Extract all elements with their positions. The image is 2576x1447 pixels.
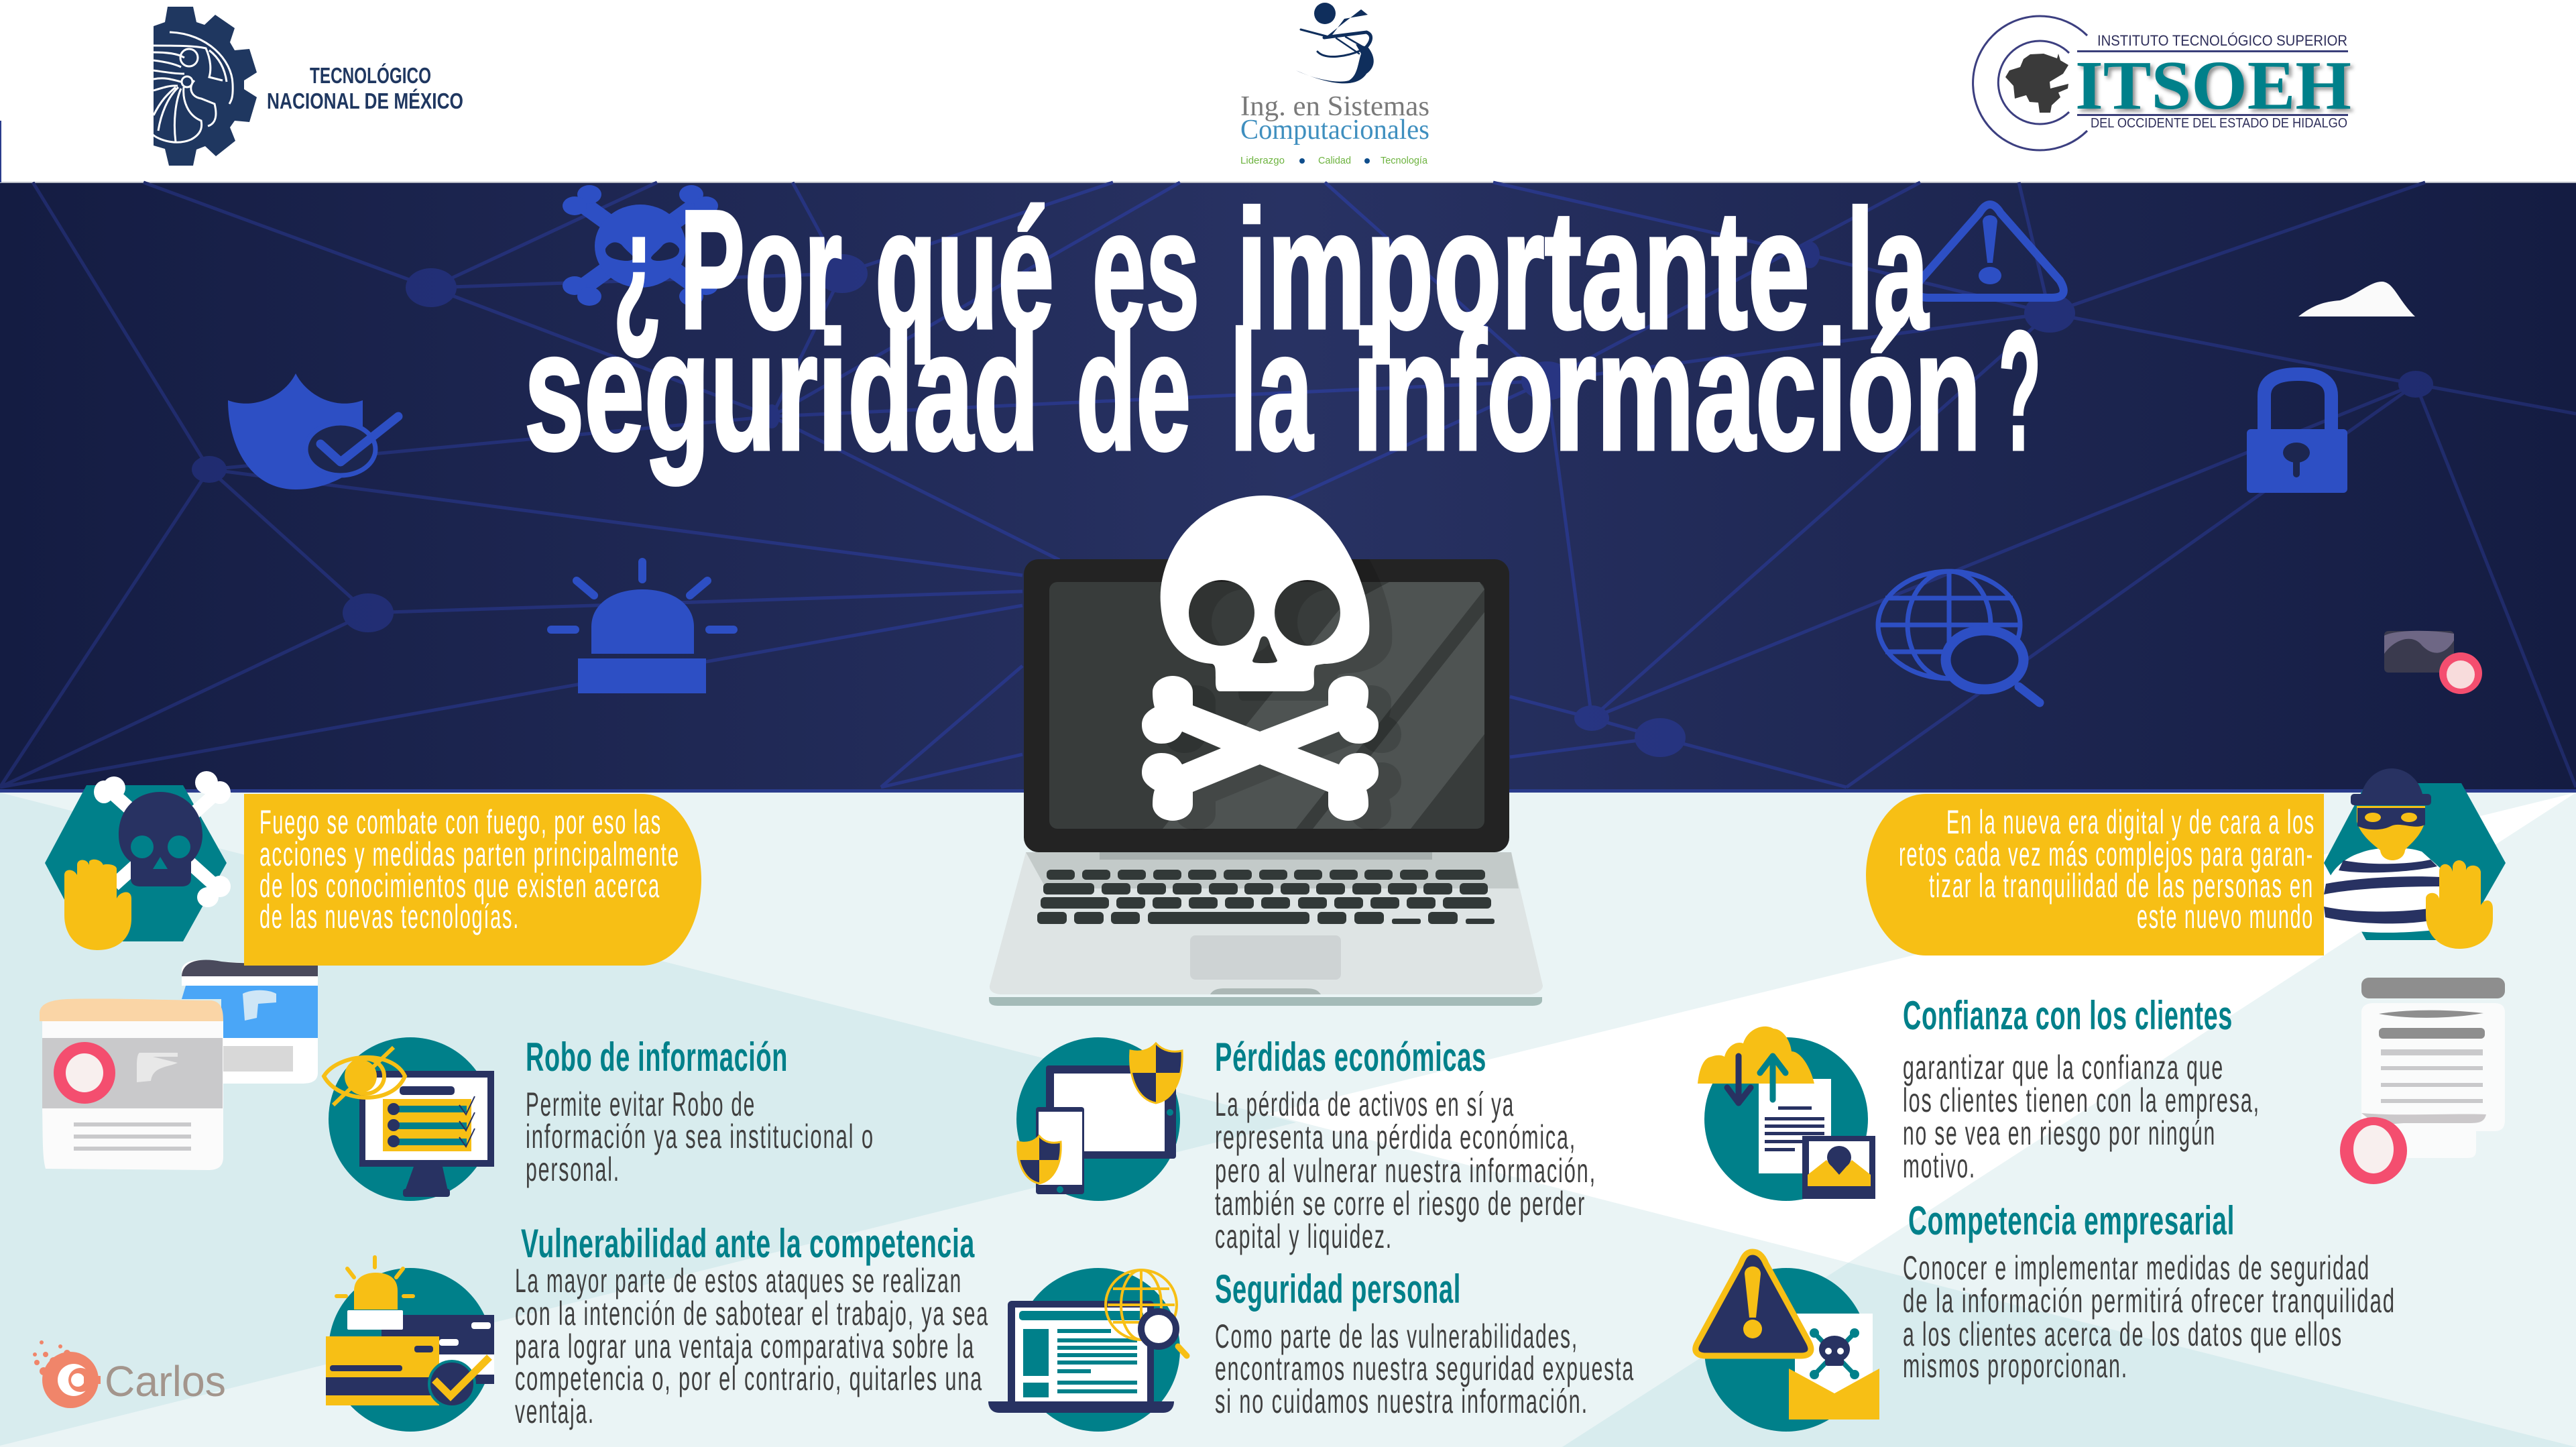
icon: globe with magnifier (1878, 571, 2040, 703)
icon: gear with eagle knight (152, 7, 257, 166)
icon: blue skull and crossbones (563, 185, 718, 306)
heading and text: Robo de información: Robo de información (526, 1035, 788, 1080)
title: ¿ (613, 176, 661, 364)
icon: shield with check (228, 373, 398, 489)
heading and text: Confianza con los clientes: los clientes tienen con la empresa, (1903, 1082, 2260, 1119)
icon: padlock (2247, 374, 2347, 493)
callout: right yellow (1866, 794, 2324, 956)
icon: cloud with document and photo (1698, 1027, 1875, 1201)
panel: right certificate document (2340, 978, 2505, 1184)
logo text: INSTITUTO TECNOLÓGICO SUPERIOR (2097, 32, 2347, 49)
title: importante (1236, 176, 1810, 364)
logo text: ITSOEH (2078, 50, 2354, 127)
logo: ITSOEH (1973, 16, 2354, 150)
heading and text: Pérdidas económicas: representa una pérdida económica, (1215, 1118, 1576, 1156)
icon: monitor checklist with eye (324, 1037, 494, 1201)
heading and text: Confianza con los clientes: garantizar que la confianza que (1903, 1049, 2224, 1086)
dark network banner (0, 121, 2576, 793)
laptop base (989, 852, 1543, 1006)
logo: Ing. en Sistemas Computacionales: Calidad (1318, 155, 1351, 166)
icon: laptop webpage with globe and magnifier (988, 1268, 1187, 1432)
icon: stylised figure swoosh (1296, 3, 1374, 83)
heading and text: Vulnerabilidad ante la competencia: Vulnerabilidad ante la competencia (521, 1221, 975, 1266)
heading and text: Pérdidas económicas (1215, 1035, 1596, 1255)
panel: left stacked documents (40, 960, 318, 1170)
heading and text: Confianza con los clientes: no se vea en riesgo por ningún (1903, 1114, 2216, 1152)
callout: right yellow: En la nueva era digital y de cara a los (1946, 803, 2315, 841)
callout: left yellow: de los conocimientos que existen acerca (259, 867, 660, 905)
icon: warning triangle and envelope (1696, 1252, 1879, 1432)
heading and text: Confianza con los clientes (1903, 993, 2260, 1185)
logo text: DEL OCCIDENTE DEL ESTADO DE HIDALGO (2091, 116, 2347, 131)
heading and text: Pérdidas económicas: capital y liquidez. (1215, 1218, 1393, 1255)
icon: alarm and credit cards (326, 1257, 494, 1432)
callout: right yellow: este nuevo mundo (2137, 898, 2314, 935)
title: de (1076, 297, 1191, 485)
heading and text: Vulnerabilidad ante la competencia: para lograr una ventaja comparativa sobre la (515, 1328, 975, 1365)
heading and text: Competencia empresarial (1903, 1198, 2396, 1385)
callout: left yellow (244, 794, 701, 966)
heading and text: Confianza con los clientes: Confianza con los clientes (1903, 993, 2233, 1038)
title: información (1352, 297, 1981, 485)
heading and text: Seguridad personal (1215, 1267, 1635, 1420)
heading and text: Robo de información (526, 1035, 874, 1188)
logo text: ITSOEH (2075, 47, 2351, 124)
logo: Tecnológico Nacional de México (152, 7, 463, 166)
text: ? (1999, 297, 2041, 485)
icon: left hexagon with skull and stop hand (45, 771, 231, 950)
heading and text: Pérdidas económicas: La pérdida de activos en sí ya (1215, 1086, 1515, 1123)
skull shadow (1167, 582, 1401, 829)
heading and text: Vulnerabilidad ante la competencia: ventaja. (515, 1393, 595, 1430)
keyboard (1037, 870, 1495, 924)
title: qué (875, 176, 1054, 364)
laptop screen (1024, 559, 1509, 852)
title: seguridad (524, 297, 1039, 485)
title: es (1092, 176, 1199, 364)
logo: Ing. en Sistemas Computacionales: Computacionales (1240, 115, 1429, 146)
heading and text: Seguridad personal: Seguridad personal (1215, 1267, 1461, 1312)
logo text: NACIONAL DE MÉXICO (267, 89, 463, 113)
heading and text: Seguridad personal: encontramos nuestra seguridad expuesta (1215, 1350, 1635, 1387)
callout: right yellow: tizar la tranquilidad de las personas en (1929, 867, 2314, 905)
heading and text: Robo de información: Permite evitar Robo de (526, 1086, 756, 1123)
logo: Ing. en Sistemas Computacionales: Tecnología (1381, 155, 1428, 166)
icon: right hexagon with thief and stop hand (2324, 768, 2506, 949)
logo: Carlos: Carlos (105, 1357, 226, 1405)
heading and text: Pérdidas económicas: pero al vulnerar nuestra información, (1215, 1152, 1596, 1190)
callout: left yellow: Fuego se combate con fuego, por eso las (259, 803, 662, 841)
logo text: Ing. en Sistemas (1240, 91, 1429, 122)
rings and state map (1973, 16, 2087, 150)
laptop illustration (989, 496, 1543, 1006)
logo: Ing. en Sistemas Computacionales (1240, 3, 1429, 166)
logo: Carlos (33, 1340, 226, 1408)
heading and text: Competencia empresarial: mismos proporcionan. (1903, 1347, 2128, 1385)
icon: warning triangle (1916, 205, 2064, 298)
heading and text: Vulnerabilidad ante la competencia: La mayor parte de estos ataques se realizan (515, 1262, 962, 1299)
heading and text: Pérdidas económicas: también se corre el riesgo de perder (1215, 1185, 1586, 1222)
title: Por (680, 176, 842, 364)
decorative white mountain (2298, 282, 2415, 316)
callout: left yellow: de las nuevas tecnologías. (259, 898, 520, 935)
icon: envelope and red ring (2384, 631, 2482, 694)
title: la (1230, 297, 1313, 485)
heading and text: Seguridad personal: si no cuidamos nuestra información. (1215, 1383, 1588, 1420)
logo text (267, 63, 463, 113)
logo: Ing. en Sistemas Computacionales: Liderazgo (1240, 155, 1285, 166)
lower background panel with geometric shapes (0, 792, 2576, 1447)
heading and text: Robo de información: personal. (526, 1151, 620, 1188)
icon: tablet and phone with shields (1016, 1037, 1182, 1201)
heading and text: Seguridad personal: Como parte de las vulnerabilidades, (1215, 1318, 1578, 1355)
heading and text: Vulnerabilidad ante la competencia: con la intención de sabotear el trabajo, ya sea (515, 1295, 989, 1332)
heading and text: Pérdidas económicas: Pérdidas económicas (1215, 1035, 1486, 1080)
title (524, 176, 2041, 485)
callout: left yellow: acciones y medidas parten principalmente (259, 835, 680, 873)
logo text: TECNOLÓGICO (310, 63, 431, 88)
title: la (1847, 176, 1929, 364)
heading and text: Vulnerabilidad ante la competencia: competencia o, por el contrario, quitarles una (515, 1360, 983, 1397)
heading and text: Confianza con los clientes: motivo. (1903, 1147, 1976, 1185)
icon: alarm siren (551, 562, 734, 693)
heading and text: Robo de información: información ya sea institucional o (526, 1118, 874, 1155)
skull and crossbones (1142, 496, 1379, 821)
heading and text: Vulnerabilidad ante la competencia (515, 1221, 989, 1430)
heading and text: Competencia empresarial: Competencia empresarial (1908, 1198, 2235, 1243)
